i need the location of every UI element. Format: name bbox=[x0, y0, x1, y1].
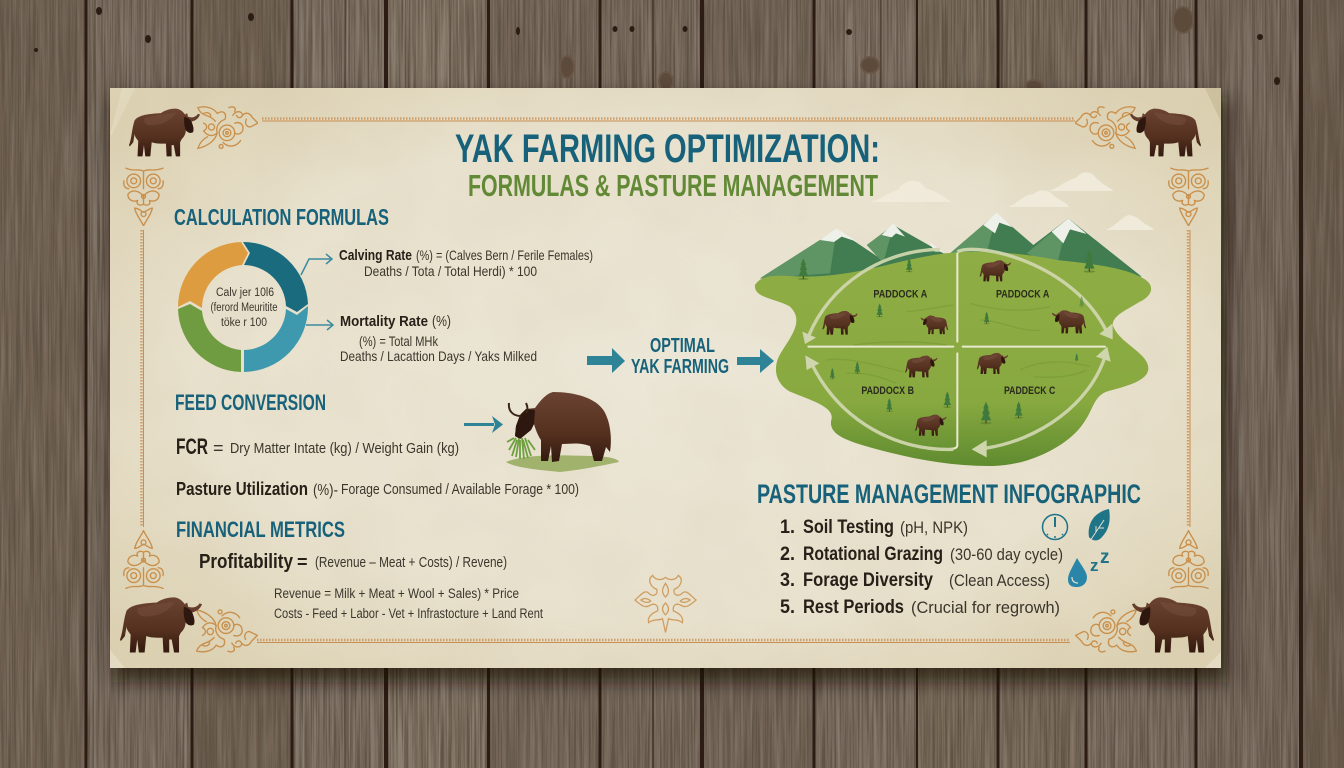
revenue formula: Revenue = Milk + Meat + Wool + Sales) * Price bbox=[274, 586, 519, 601]
mortality rate formula: (%) bbox=[432, 313, 451, 330]
mortality rate formula bbox=[340, 313, 537, 364]
subtitle: FORMULAS & PASTURE MANAGEMENT bbox=[468, 168, 878, 203]
list item 2: 2. bbox=[780, 544, 795, 565]
yak: bottom left bbox=[120, 597, 202, 653]
icon: water drop bbox=[1068, 558, 1087, 587]
paddock labels bbox=[861, 288, 1055, 397]
costs formula: Costs - Feed + Labor - Vet + Infrastocture + Land Rent bbox=[274, 606, 543, 621]
pasture map bbox=[755, 213, 1151, 466]
list item 5: 5. bbox=[780, 597, 795, 618]
list item 5 bbox=[780, 597, 1060, 618]
rotation arrowheads bbox=[802, 323, 1113, 457]
paddock labels: PADDOCK A bbox=[873, 288, 927, 300]
heading: pasture management infographic: PASTURE MANAGEMENT INFOGRAPHIC bbox=[757, 479, 1141, 509]
list item 5: Rest Periods bbox=[803, 597, 904, 618]
trees bbox=[798, 249, 1095, 424]
arrow: to pasture map bbox=[737, 349, 774, 373]
label: optimal yak farming: OPTIMAL bbox=[650, 335, 715, 357]
corner ornaments bbox=[124, 107, 1208, 652]
heading: calculation formulas: CALCULATION FORMULAS bbox=[174, 204, 389, 230]
list item 5: (Crucial for regrowh) bbox=[911, 598, 1060, 617]
FCR formula: = bbox=[213, 438, 224, 458]
FCR formula bbox=[176, 434, 459, 459]
pasture utilization formula: Forage Consumed / Available Forage * 100) bbox=[341, 481, 579, 498]
list item 1: Soil Testing bbox=[803, 517, 894, 538]
paddock labels: PADDOCK A bbox=[996, 288, 1049, 300]
icon: rest zz bbox=[1090, 547, 1110, 575]
mortality rate formula: Mortality Rate bbox=[340, 313, 428, 330]
list item 3 bbox=[780, 570, 1050, 591]
donut center text: Calv jer 10l6 bbox=[216, 287, 274, 299]
mountains bbox=[760, 213, 1142, 280]
donut segment: light teal bbox=[244, 306, 308, 372]
mortality rate formula: (%) = Total MHk bbox=[359, 333, 439, 349]
donut chart bbox=[178, 242, 308, 372]
arrow: donut to mortality rate bbox=[306, 320, 333, 330]
mortality rate formula: Deaths / Lacattion Days / Yaks Milked bbox=[340, 348, 537, 364]
list item 1 bbox=[780, 517, 968, 538]
title: YAK FARMING OPTIMIZATION: bbox=[455, 127, 880, 171]
pasture utilization formula: Pasture Utilization bbox=[176, 479, 308, 499]
calving rate formula: Calving Rate bbox=[339, 247, 412, 264]
grazing yak illustration bbox=[506, 392, 619, 472]
green island bbox=[755, 252, 1151, 466]
list item 2: (30-60 day cycle) bbox=[950, 545, 1063, 564]
yak: top right bbox=[1130, 109, 1201, 156]
calving rate formula bbox=[339, 247, 593, 279]
list item 3: Forage Diversity bbox=[803, 570, 933, 591]
icon: leaf bbox=[1089, 509, 1110, 541]
list item 1: (pH, NPK) bbox=[900, 518, 968, 537]
yak: bottom right bbox=[1132, 597, 1214, 653]
paddock labels: PADDECK C bbox=[1004, 385, 1055, 397]
list item 3: 3. bbox=[780, 570, 795, 591]
decorative border bbox=[142, 118, 1190, 642]
donut segment: dark teal bbox=[243, 242, 308, 312]
donut segment: orange bbox=[178, 242, 248, 308]
paddock yaks bbox=[822, 260, 1086, 436]
yak: top left bbox=[129, 109, 200, 156]
label: optimal yak farming bbox=[631, 335, 729, 378]
calving rate formula: (%) = (Calves Bern / Ferile Females) bbox=[416, 247, 593, 263]
heading: feed conversion: FEED CONVERSION bbox=[175, 390, 326, 415]
list item 1: 1. bbox=[780, 517, 795, 538]
FCR formula: Dry Matter Intate (kg) / Weight Gain (kg) bbox=[230, 440, 459, 457]
arrow: donut to calving rate bbox=[301, 254, 332, 275]
donut segment: green bbox=[178, 304, 241, 372]
list item 2 bbox=[780, 544, 1063, 565]
center bottom ornament bbox=[635, 575, 696, 633]
paddock dividers bbox=[808, 253, 1105, 449]
heading: financial metrics: FINANCIAL METRICS bbox=[176, 517, 345, 542]
list: pasture practices bbox=[780, 517, 1063, 618]
pasture contours bbox=[827, 303, 1090, 383]
icon: rest zz: z bbox=[1100, 547, 1110, 568]
pasture utilization formula bbox=[176, 479, 579, 499]
icon: clock bbox=[1042, 514, 1068, 540]
arrow: to grazing yak bbox=[464, 416, 503, 433]
donut center text: töke r 100 bbox=[221, 317, 267, 329]
arrow: into optimal yak farming bbox=[587, 348, 625, 373]
rotation arrows bbox=[808, 249, 1107, 449]
profitability formula: Profitability bbox=[199, 551, 294, 573]
profitability formula: = bbox=[297, 552, 308, 572]
icon: rest zz: z bbox=[1090, 556, 1098, 575]
list item 2: Rotational Grazing bbox=[803, 544, 943, 565]
donut center text bbox=[210, 287, 278, 329]
FCR formula: FCR bbox=[176, 434, 208, 459]
profitability formula bbox=[199, 551, 507, 573]
profitability formula: (Revenue – Meat + Costs) / Revene) bbox=[315, 554, 507, 571]
list item 3: (Clean Access) bbox=[949, 571, 1050, 590]
pasture utilization formula: (%)- bbox=[313, 482, 338, 499]
parchment panel bbox=[110, 88, 1221, 668]
paper shadow bbox=[112, 98, 1228, 682]
clouds bbox=[870, 172, 1154, 230]
calving rate formula: Deaths / Tota / Total Herdi) * 100 bbox=[364, 263, 537, 279]
paddock labels: PADDOCX B bbox=[861, 385, 914, 397]
label: optimal yak farming: YAK FARMING bbox=[631, 356, 729, 378]
donut center text: (ferord Meuritite bbox=[210, 302, 278, 314]
